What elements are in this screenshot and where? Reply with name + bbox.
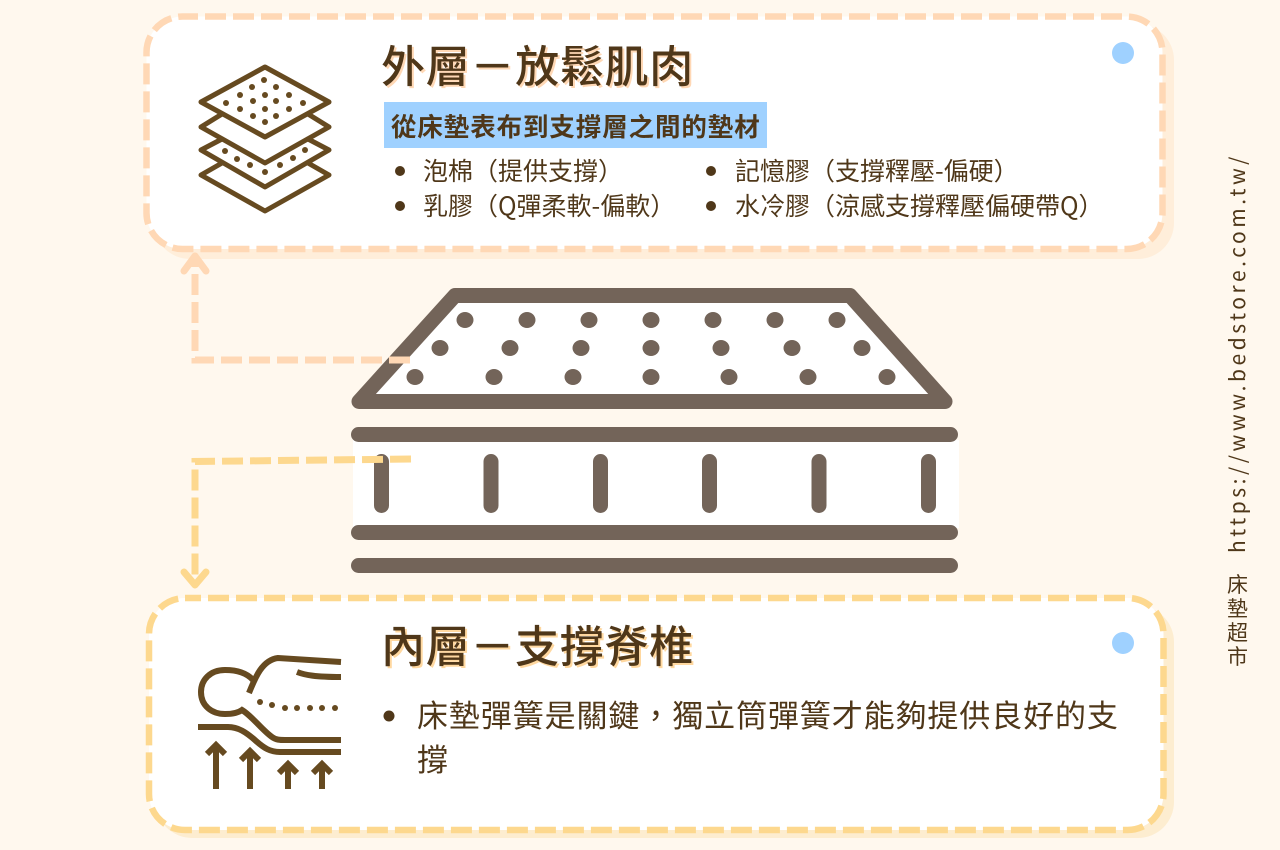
panel: inner layer (149, 598, 1174, 838)
mattress top (359, 296, 945, 402)
heading: outer layer: 外層－放鬆肌肉 (381, 31, 694, 95)
body text: 床墊彈簧是關鍵，獨立筒彈簧才能夠提供良好的支 (417, 691, 1119, 736)
material list: 乳膠（Q彈柔軟-偏軟） (423, 187, 675, 223)
body text: 撐 (417, 735, 448, 780)
website url: https://www.bedstore.com.tw/ (1222, 153, 1252, 553)
icon: blue dot (1112, 42, 1134, 64)
brand name vertical: 市 (1227, 641, 1248, 671)
material list: 水冷膠（涼感支撐釋壓偏硬帶Q） (735, 187, 1104, 223)
panel: outer layer (146, 16, 1174, 259)
brand name vertical: 墊 (1227, 593, 1248, 623)
heading: outer layer: 外層－放鬆肌肉 (383, 33, 696, 97)
material list: 記憶膠（支撐釋壓-偏硬） (735, 152, 1019, 188)
body text (384, 691, 1119, 780)
material list: 泡棉（提供支撐） (423, 152, 623, 188)
heading: inner layer: 內層－支撐脊椎 (381, 611, 694, 675)
icon: body on mattress with support arrows (198, 658, 341, 789)
brand name vertical: 床 (1227, 569, 1248, 599)
arrow: mattress top to outer layer (184, 256, 410, 360)
heading: inner layer: 內層－支撐脊椎 (383, 613, 696, 677)
mattress springs (351, 427, 959, 573)
brand name vertical: 超 (1227, 617, 1248, 647)
icon: layers (201, 67, 329, 211)
brand name vertical (1227, 569, 1248, 671)
subheading highlight: 從床墊表布到支撐層之間的墊材 (391, 107, 761, 144)
arrow: mattress springs to inner layer (184, 459, 411, 585)
mattress illustration (351, 296, 959, 573)
icon: blue dot (1112, 632, 1134, 654)
material list (395, 152, 1104, 223)
